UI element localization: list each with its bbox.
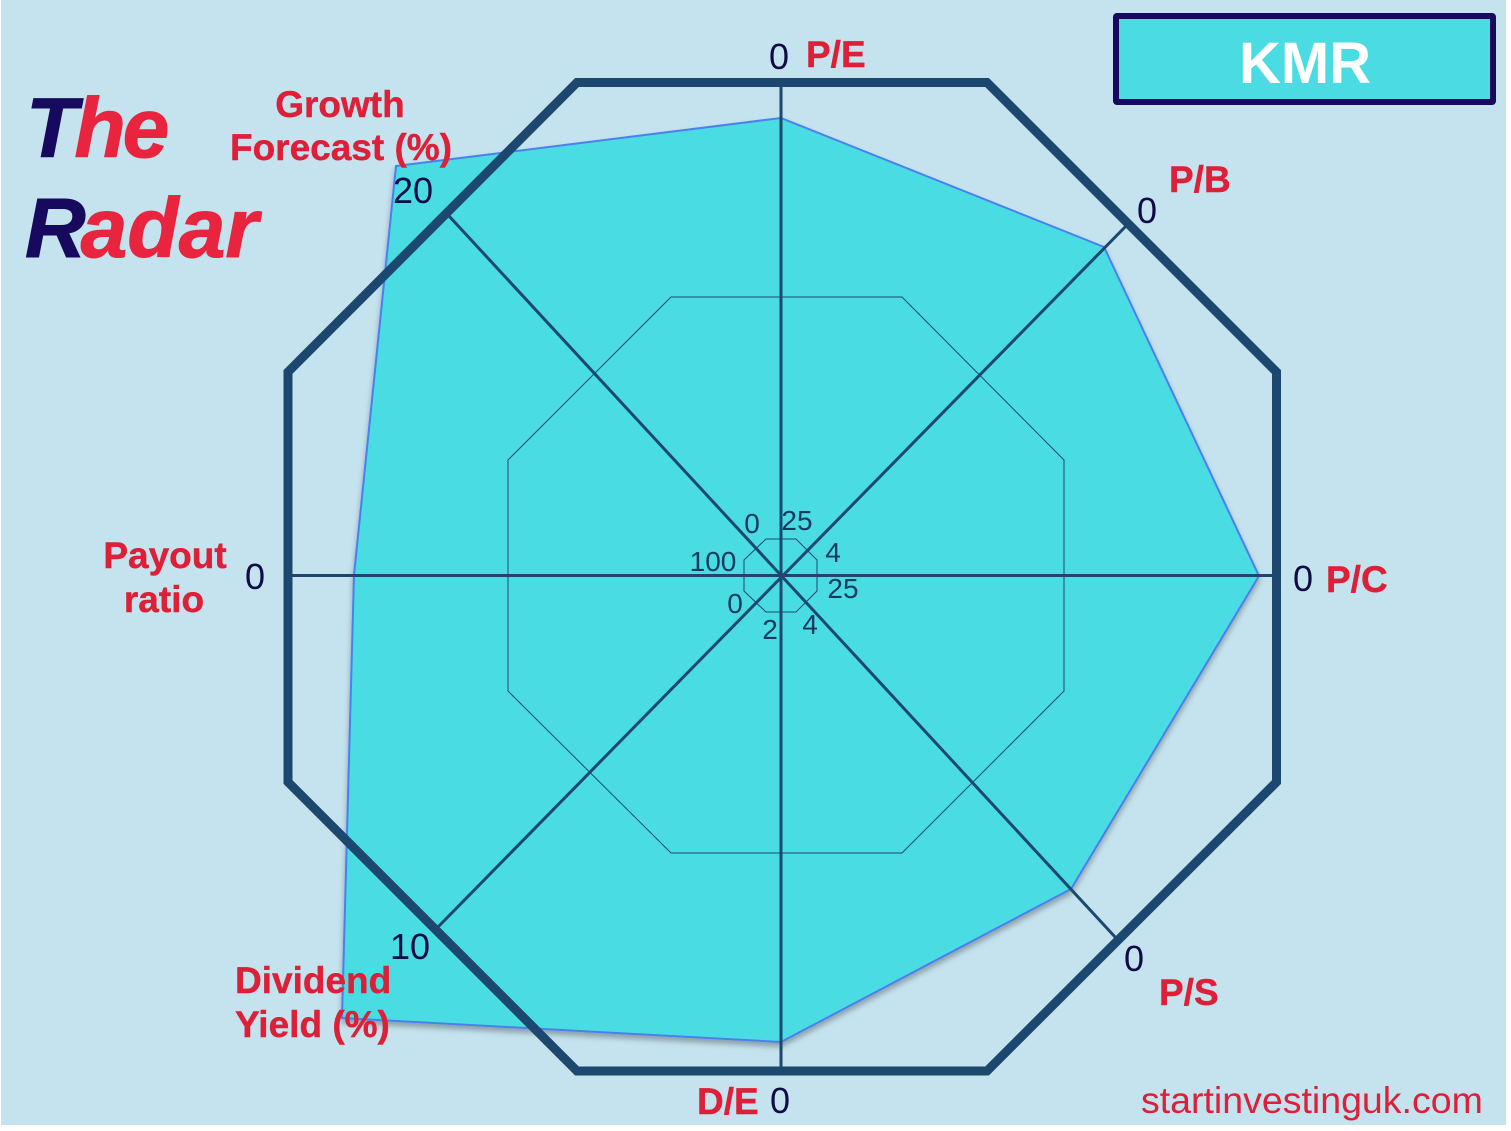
axis label: Dividend Yield: Dividend <box>235 960 391 1001</box>
inner scale values: 0 <box>727 588 743 619</box>
outer scale values: 0 <box>1124 938 1144 979</box>
inner scale values: 100 <box>690 546 736 577</box>
title: The Radar <box>25 81 262 275</box>
inner scale values: 4 <box>802 609 818 640</box>
inner scale values: 25 <box>781 505 813 536</box>
outer ring octagon <box>288 82 1276 1071</box>
middle ring octagon <box>508 297 1064 853</box>
axis label: P/B: P/B <box>1169 159 1231 200</box>
outer scale values: 0 <box>1293 558 1313 599</box>
axis label: P/E: P/E <box>806 34 866 75</box>
ticker box: KMR: KMR <box>1239 31 1371 96</box>
axis label: Growth Forecast: Forecast (%) <box>230 127 452 168</box>
inner scale values: 4 <box>825 537 841 568</box>
website credit: startinvestinguk.com <box>1141 1079 1483 1121</box>
axis label: Dividend Yield <box>235 960 391 1045</box>
ticker box: KMR <box>1116 16 1493 102</box>
title: The Radar: The <box>26 81 168 175</box>
axis label: Dividend Yield: Yield (%) <box>235 1004 390 1045</box>
outer scale values <box>245 36 1313 1121</box>
outer scale values: 10 <box>390 926 430 967</box>
radar axes <box>290 85 1273 1068</box>
inner scale values: 0 <box>744 508 760 539</box>
outer scale values: 0 <box>769 36 789 77</box>
inner scale values: 2 <box>762 614 778 645</box>
axis label: D/E: D/E <box>697 1081 759 1122</box>
inner scale values <box>690 505 859 645</box>
outer scale values: 0 <box>770 1080 790 1121</box>
outer scale values: 20 <box>393 170 433 211</box>
axis label: Payout ratio <box>103 535 227 620</box>
radar data polygon <box>342 118 1259 1042</box>
axis label: Payout ratio: ratio <box>124 579 204 620</box>
axis label: Payout ratio: Payout <box>103 535 227 576</box>
outer scale values: 0 <box>245 556 265 597</box>
inner ring octagon <box>744 539 817 612</box>
axis label: P/C: P/C <box>1326 559 1388 600</box>
outer scale values: 0 <box>1137 190 1157 231</box>
axis label: Growth Forecast: Growth <box>275 84 405 125</box>
title: The Radar: Radar <box>25 181 262 275</box>
axis label: P/S: P/S <box>1159 972 1219 1013</box>
axis label: Growth Forecast <box>230 84 452 168</box>
inner scale values: 25 <box>827 573 859 604</box>
